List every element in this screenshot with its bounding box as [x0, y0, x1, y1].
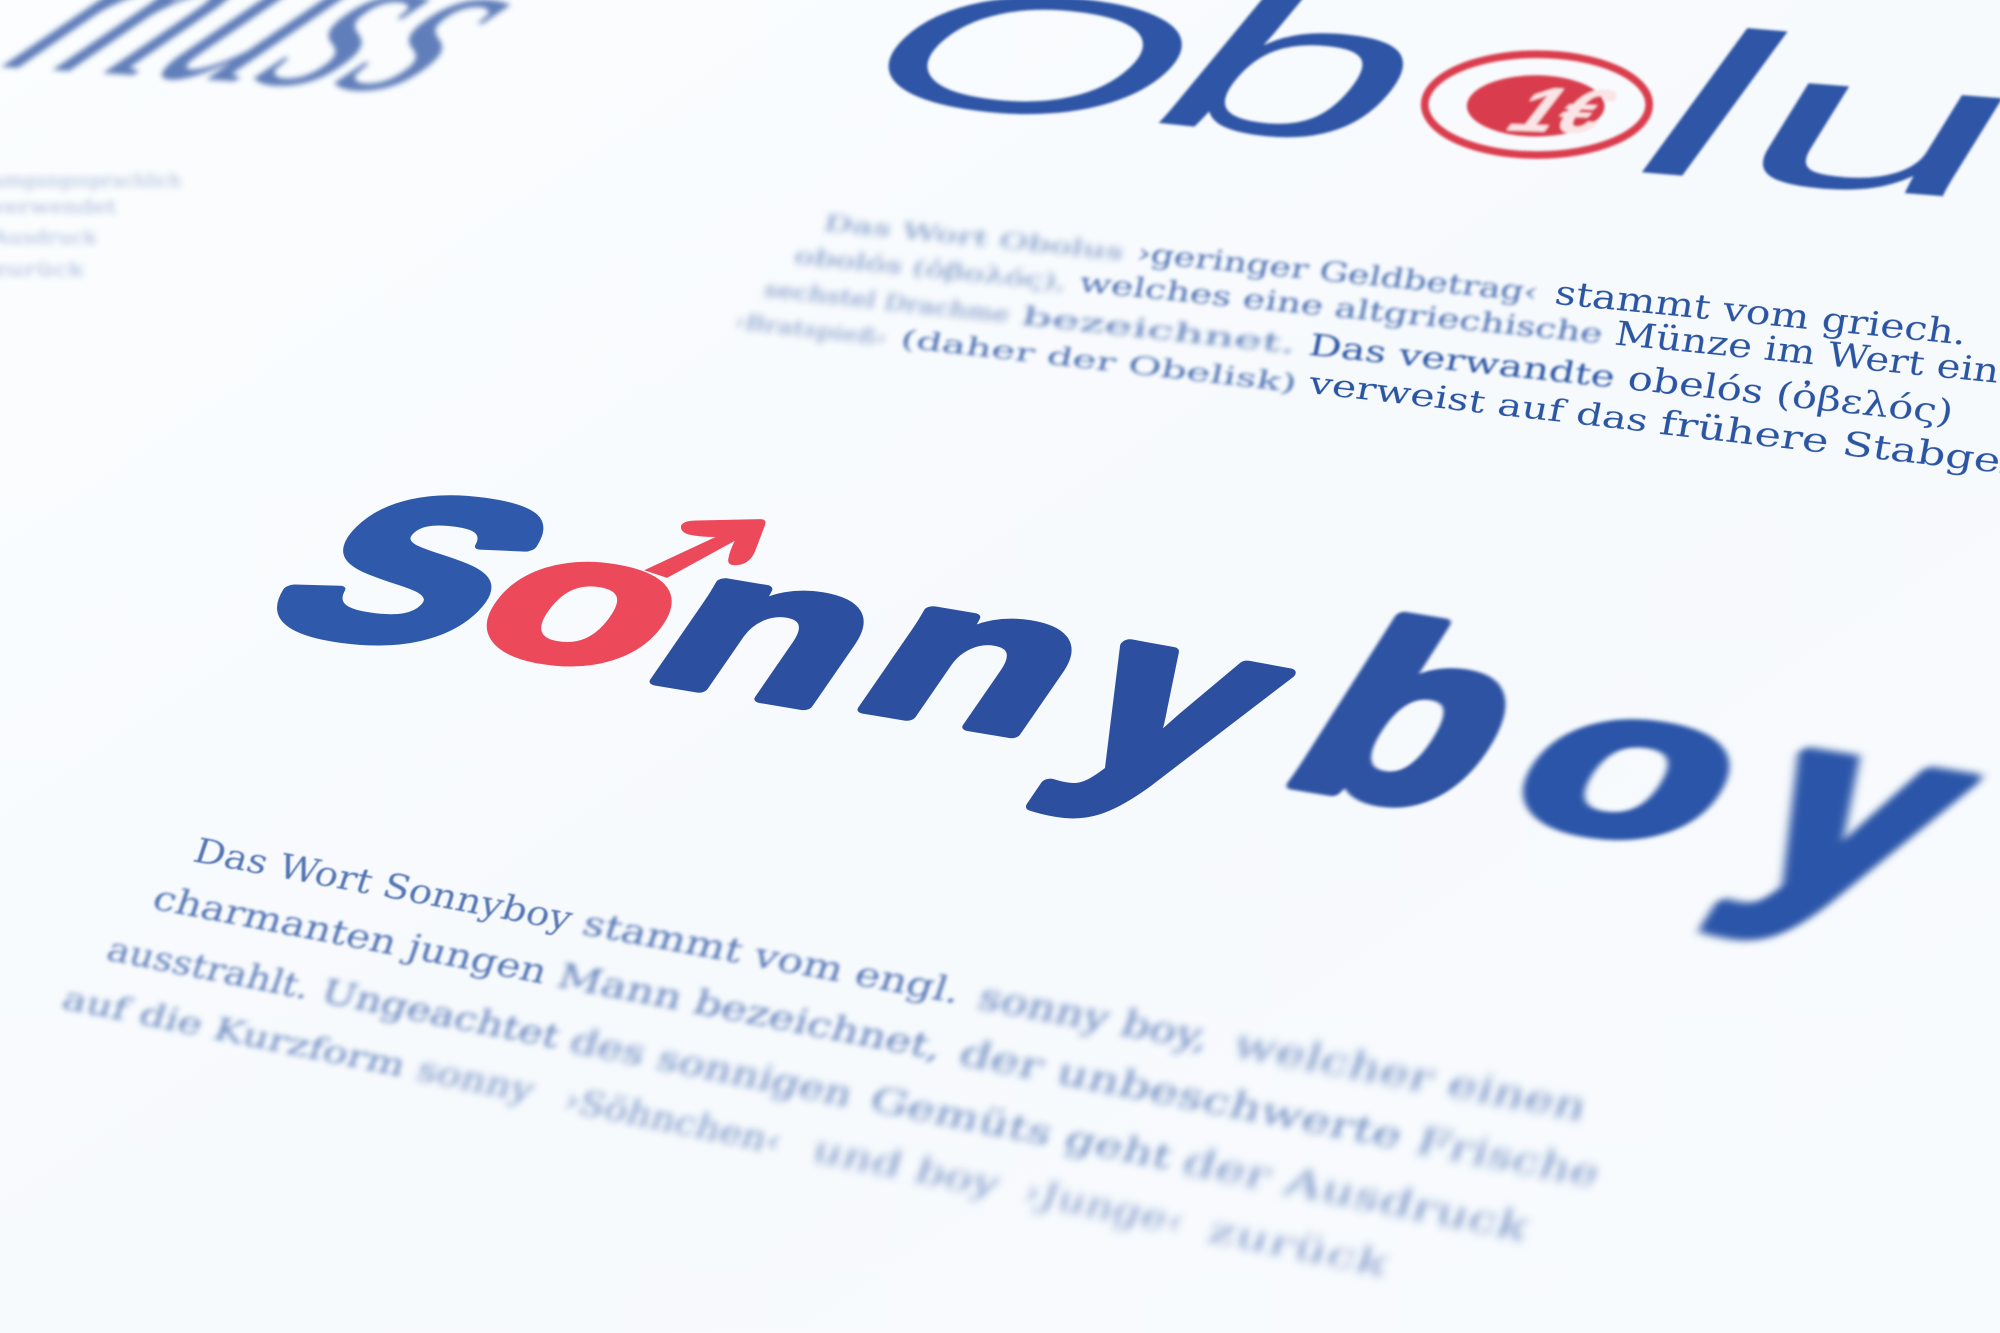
text block: Sonnyboy description: sonny	[412, 1050, 540, 1110]
text block: Sonnyboy description: ausstrahlt.	[102, 930, 316, 1007]
text block: Obolus description: Münze im Wert eines	[1612, 314, 2000, 395]
logo: Sonnyboy wordmark: n	[817, 539, 1146, 776]
text block: Sonnyboy description: des sonnigen	[565, 1022, 858, 1115]
text block: Obolus description: frühere Stabgeld	[1657, 403, 2000, 485]
text block: Obolus description: obelós (ὀβελός)	[1625, 359, 1956, 432]
text block: Sonnyboy description: charmanten jungen	[148, 879, 553, 992]
text block: Sonnyboy description: Das Wort Sonnyboy	[188, 831, 578, 939]
text block: Sonnyboy description: welcher einen	[1228, 1024, 1592, 1129]
text block: Sonnyboy description: ›Söhnchen‹	[559, 1080, 788, 1161]
text block: Obolus description: verweist auf das	[1304, 366, 1651, 439]
text block: Sonnyboy description: zurück	[1203, 1210, 1396, 1284]
logo: Sonnyboy wordmark: b	[1244, 574, 1587, 859]
small text fragment, top left	[0, 170, 181, 281]
text block: Sonnyboy description: Frische	[1410, 1121, 1605, 1195]
text block: Obolus description: Das verwandte	[1306, 328, 1618, 394]
icon: red coin emblem as the o	[1425, 54, 1649, 155]
text block: Sonnyboy description: Gemüts geht	[864, 1080, 1178, 1178]
logo: Sonnyboy wordmark	[208, 450, 2000, 956]
icon: red coin emblem as the o: 1€	[1491, 74, 1635, 146]
text block: Obolus description: welches eine altgriechische	[1076, 267, 1606, 350]
text block: Obolus description: obolós (ὀβολός),	[792, 244, 1069, 296]
text block: Sonnyboy description: Mann bezeichnet,	[552, 957, 948, 1068]
text block: Obolus description: stammt vom griech.	[1552, 273, 1970, 353]
text block: Sonnyboy description: der unbeschwerte	[954, 1033, 1408, 1157]
text block: Obolus description: (daher der Obelisk)	[898, 324, 1300, 399]
text block: Obolus description	[732, 211, 2000, 485]
heading: Obolus	[793, 0, 2000, 238]
text block: Sonnyboy description: sonny boy,	[973, 977, 1215, 1059]
text block: Sonnyboy description: stammt vom engl.	[577, 904, 966, 1012]
text block: Obolus description: Das Wort Obolus	[821, 211, 1126, 265]
logo: red o with male-symbol arrow: o	[431, 491, 748, 710]
text block: Sonnyboy description	[57, 831, 1605, 1284]
text block: Sonnyboy description: der Ausdruck	[1177, 1142, 1535, 1249]
text block: Sonnyboy description: auf die Kurzform	[57, 979, 411, 1084]
text block: Sonnyboy description: ›Junge‹	[1018, 1172, 1191, 1241]
text block: Sonnyboy description: Ungeachtet	[316, 972, 566, 1056]
logo: Sonnyboy wordmark: o	[1465, 637, 1807, 890]
text block: Obolus description: ›Bratspieß‹	[732, 309, 890, 350]
text block: Sonnyboy description: und boy	[807, 1130, 1006, 1204]
logo: Sonnyboy wordmark: S	[208, 450, 617, 691]
text block: Obolus description: sechstel Drachme	[761, 277, 1012, 328]
logo: Sonnyboy wordmark: y	[1016, 563, 1346, 837]
text block: Obolus description: ›geringer Geldbetrag‹	[1134, 238, 1541, 308]
logo: Sonnyboy wordmark: n	[609, 511, 938, 748]
text block: Obolus description: bezeichnet.	[1019, 301, 1299, 360]
